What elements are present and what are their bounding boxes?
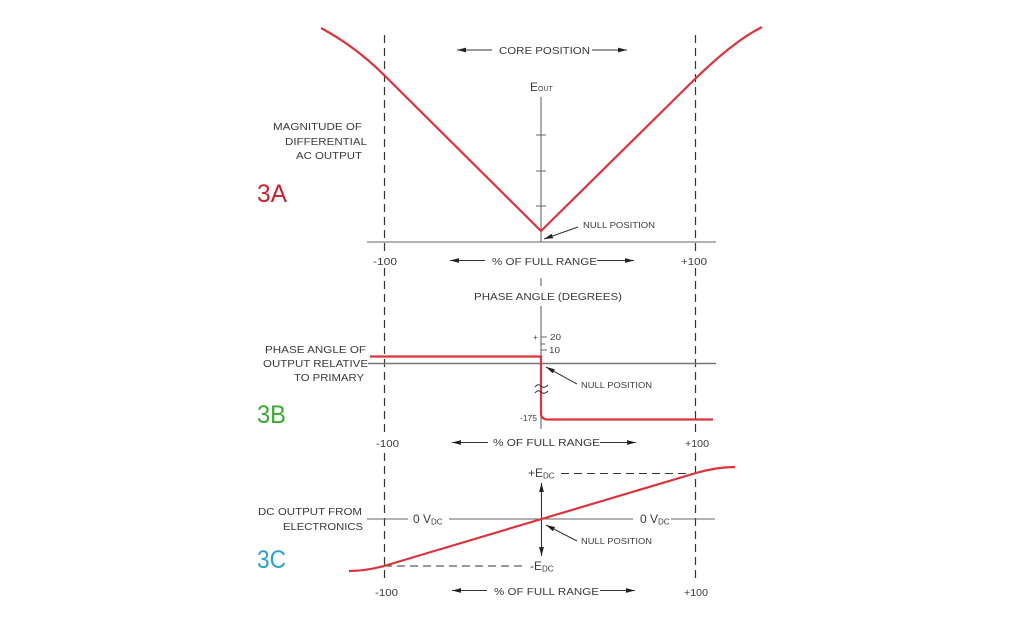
text: magnitude of differential AC output — [273, 121, 367, 162]
tick labels: -175 — [520, 414, 538, 423]
text: DC output from electronics — [258, 506, 363, 533]
labels: voltage: 0 V — [640, 512, 658, 526]
axis label: E out: EOUT — [530, 80, 554, 94]
axis label row: percent of full range — [375, 586, 708, 599]
text: phase angle of output relative to primary: TO PRIMARY — [294, 372, 364, 384]
callout: null position — [544, 221, 655, 239]
labels: voltage: DC — [658, 518, 670, 526]
badge: 3B: 3B — [257, 401, 286, 429]
badge: 3C: 3C — [257, 546, 286, 574]
text: magnitude of differential AC output: MAGNITUDE OF — [273, 121, 362, 133]
tick labels: 10 — [549, 346, 561, 355]
text: DC output from electronics: ELECTRONICS — [283, 521, 363, 533]
heading: core position: CORE POSITION — [499, 45, 590, 57]
axis label row: percent of full range: % OF FULL RANGE — [493, 437, 600, 449]
axes and ticks — [367, 97, 716, 242]
labels: voltage: -E — [530, 559, 542, 573]
axis label row: percent of full range: -100 — [375, 587, 398, 599]
curve: DC output — [349, 467, 735, 571]
curve: phase — [370, 356, 713, 420]
phase zero line — [368, 362, 716, 364]
axes and ticks — [541, 278, 547, 429]
labels: voltage: DC — [431, 518, 443, 526]
callout: null position — [546, 367, 652, 390]
dashed E DC levels — [384, 474, 696, 566]
axis label row: percent of full range: % OF FULL RANGE — [494, 586, 599, 598]
tick labels — [520, 333, 562, 423]
axis title: phase angle degrees: PHASE ANGLE (DEGREES) — [474, 291, 622, 303]
callout: null position: NULL POSITION — [581, 537, 652, 546]
zero line — [367, 518, 715, 520]
text: DC output from electronics: DC OUTPUT FROM — [258, 506, 362, 518]
panel: 3B phase angle — [257, 278, 716, 450]
axis label row: percent of full range: +100 — [685, 438, 709, 450]
callout: null position: NULL POSITION — [583, 221, 655, 230]
callout: null position: NULL POSITION — [581, 381, 652, 390]
tick labels: 20 — [550, 333, 562, 342]
vertical double arrow — [540, 483, 542, 556]
labels: voltage: DC — [542, 564, 554, 574]
text: phase angle of output relative to primary — [263, 344, 368, 384]
axis label row: percent of full range — [373, 256, 707, 268]
icon: axis break — [535, 385, 548, 393]
text: phase angle of output relative to primary: PHASE ANGLE OF — [265, 344, 366, 356]
axis label row: percent of full range: % OF FULL RANGE — [492, 256, 597, 268]
curve: magnitude — [321, 27, 762, 231]
badge: 3A: 3A — [257, 180, 287, 208]
callout: null position — [546, 525, 652, 546]
axis label row: percent of full range: +100 — [681, 256, 707, 268]
axis label row: percent of full range: +100 — [684, 587, 708, 599]
labels: voltage — [413, 466, 670, 574]
axis label row: percent of full range — [376, 437, 709, 450]
axis label row: percent of full range: -100 — [373, 256, 397, 268]
tick labels: + — [533, 333, 538, 342]
labels: voltage: DC — [543, 472, 555, 480]
labels: voltage: 0 V — [413, 512, 431, 526]
text: magnitude of differential AC output: AC OUTPUT — [296, 150, 363, 162]
text: magnitude of differential AC output: DIFFERENTIAL — [285, 136, 367, 148]
labels: voltage: +E — [528, 466, 543, 480]
panel: 3C DC output — [257, 466, 735, 599]
panel: 3A magnitude of differential output — [257, 27, 762, 268]
text: phase angle of output relative to primary: OUTPUT RELATIVE — [263, 358, 368, 370]
axis label row: percent of full range: -100 — [376, 438, 399, 450]
dashed limit lines — [384, 35, 696, 582]
